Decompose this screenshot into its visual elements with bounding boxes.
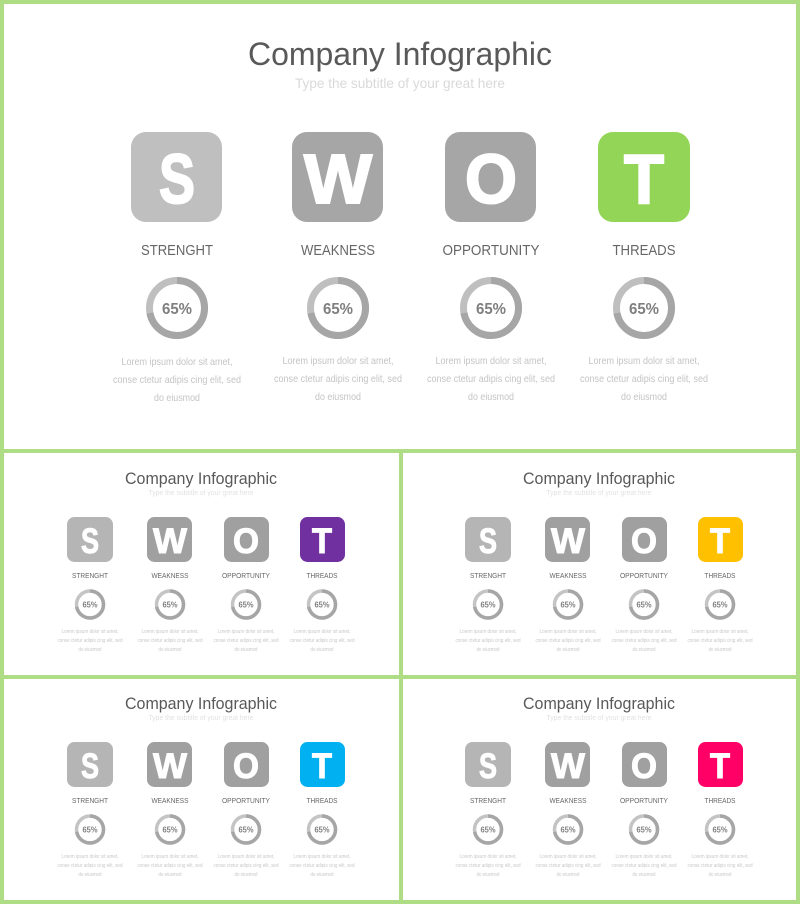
panel: blue variant: Lorem ipsum dolor sit amet, — [294, 854, 350, 860]
panel: blue variant: conse ctetur adipis cing elit, sed — [290, 863, 355, 869]
panel: pink variant: O — [631, 747, 657, 786]
panel: blue variant: STRENGHT — [72, 796, 108, 805]
column: weakness: do eiusmod — [315, 391, 361, 403]
column: weakness: W — [304, 140, 372, 218]
panel: purple variant: S — [81, 522, 99, 561]
panel: pink variant: Type the subtitle of your great here — [546, 715, 652, 722]
column: strength: 65% — [162, 301, 192, 318]
panel: yellow variant: W — [551, 522, 585, 561]
panel: purple variant: 65% — [314, 600, 330, 610]
panel: blue variant: THREADS — [306, 796, 338, 805]
panel: yellow variant: conse ctetur adipis cing elit, sed — [536, 638, 601, 644]
panel: pink variant: Lorem ipsum dolor sit amet, — [460, 854, 516, 860]
column: opportunity: do eiusmod — [468, 391, 514, 403]
panel: yellow variant: conse ctetur adipis cing elit, sed — [456, 638, 521, 644]
panel: blue variant — [4, 679, 399, 900]
panel: pink variant: THREADS — [704, 796, 736, 805]
panel: pink variant: 65% — [560, 826, 576, 834]
panel: blue variant: WEAKNESS — [152, 796, 188, 805]
panel: blue variant: 65% — [314, 826, 330, 834]
panel: pink variant: conse ctetur adipis cing elit, sed — [456, 863, 521, 869]
panel: yellow variant: THREADS — [704, 571, 736, 580]
panel: purple variant: 65% — [238, 600, 254, 610]
column: opportunity: conse ctetur adipis cing elit, sed — [427, 373, 555, 385]
panel: yellow variant — [403, 453, 796, 675]
column: weakness: WEAKNESS — [301, 243, 375, 259]
panel: purple variant: Type the subtitle of your great here — [148, 490, 254, 497]
column: strength: do eiusmod — [154, 392, 200, 404]
column: opportunity: 65% — [476, 301, 506, 318]
title: Company Infographic — [248, 36, 552, 72]
panel: blue variant: do eiusmod — [158, 872, 182, 878]
panel: blue variant: 65% — [82, 826, 98, 834]
column: opportunity — [427, 132, 555, 403]
column: threads: conse ctetur adipis cing elit, sed — [580, 373, 708, 385]
panel: purple variant: WEAKNESS — [152, 571, 188, 580]
panel: blue variant: O — [233, 747, 259, 786]
panel: yellow variant: S — [479, 522, 497, 561]
column: threads — [580, 132, 708, 403]
panel: pink variant: STRENGHT — [470, 796, 506, 805]
panel: blue variant: 65% — [162, 826, 178, 834]
panel: pink variant: 65% — [636, 826, 652, 834]
panel: pink variant: conse ctetur adipis cing elit, sed — [612, 863, 677, 869]
panel: yellow variant: WEAKNESS — [550, 571, 586, 580]
column: weakness: 65% — [323, 301, 353, 318]
panel: yellow variant: Lorem ipsum dolor sit amet, — [616, 629, 672, 635]
panel: purple variant: do eiusmod — [78, 647, 102, 653]
panel: purple variant: Lorem ipsum dolor sit amet, — [62, 629, 118, 635]
panel: pink variant: 65% — [712, 826, 728, 834]
column: threads: T — [624, 140, 664, 218]
panel: purple variant: Company Infographic — [125, 470, 277, 488]
panel: pink variant: 65% — [480, 826, 496, 834]
column: opportunity: Lorem ipsum dolor sit amet, — [436, 355, 546, 367]
panel: purple variant: conse ctetur adipis cing elit, sed — [58, 638, 123, 644]
panel: pink variant: S — [479, 747, 497, 786]
panel: yellow variant: 65% — [480, 600, 496, 610]
panel: yellow variant: 65% — [636, 600, 652, 610]
panel: yellow variant: 65% — [560, 600, 576, 610]
panel: purple variant — [4, 453, 399, 675]
panel: purple variant: THREADS — [306, 571, 338, 580]
panel: blue variant: conse ctetur adipis cing elit, sed — [58, 863, 123, 869]
subtitle: Type the subtitle of your great here — [295, 75, 505, 91]
panel: yellow variant: conse ctetur adipis cing elit, sed — [612, 638, 677, 644]
panel: blue variant: Company Infographic — [125, 695, 277, 713]
panel: blue variant: do eiusmod — [234, 872, 258, 878]
panel: purple variant: 65% — [82, 600, 98, 610]
panel: yellow variant: conse ctetur adipis cing elit, sed — [688, 638, 753, 644]
column: weakness — [274, 132, 402, 403]
panel: yellow variant: STRENGHT — [470, 571, 506, 580]
panel: blue variant: Lorem ipsum dolor sit amet, — [142, 854, 198, 860]
panel: pink variant: W — [551, 747, 585, 786]
panel: pink variant: Lorem ipsum dolor sit amet, — [616, 854, 672, 860]
panel: yellow variant: do eiusmod — [708, 647, 732, 653]
panel: yellow variant: do eiusmod — [556, 647, 580, 653]
panel: purple variant: do eiusmod — [234, 647, 258, 653]
panel: yellow variant: do eiusmod — [476, 647, 500, 653]
column: threads: THREADS — [612, 243, 676, 259]
column: opportunity: OPPORTUNITY — [442, 243, 540, 259]
panel: yellow variant: O — [631, 522, 657, 561]
panel: purple variant: conse ctetur adipis cing elit, sed — [290, 638, 355, 644]
panel: pink variant: do eiusmod — [632, 872, 656, 878]
panel: purple variant: W — [153, 522, 187, 561]
column: threads: Lorem ipsum dolor sit amet, — [588, 355, 700, 367]
panel: yellow variant: Type the subtitle of your great here — [546, 490, 652, 497]
panel: yellow variant: OPPORTUNITY — [620, 571, 668, 580]
column: strength: STRENGHT — [141, 243, 213, 259]
panel: pink variant: conse ctetur adipis cing elit, sed — [536, 863, 601, 869]
panel: pink variant: WEAKNESS — [550, 796, 586, 805]
column: strength: Lorem ipsum dolor sit amet, — [122, 356, 232, 368]
panel: purple variant: do eiusmod — [310, 647, 334, 653]
panel: purple variant: STRENGHT — [72, 571, 108, 580]
panel: purple variant: O — [233, 522, 259, 561]
column: weakness: Lorem ipsum dolor sit amet, — [282, 355, 394, 367]
column: weakness: conse ctetur adipis cing elit, sed — [274, 373, 402, 385]
panel: yellow variant: T — [710, 522, 730, 561]
column: strength: S — [159, 140, 195, 218]
panel: blue variant: W — [153, 747, 187, 786]
panel: yellow variant: do eiusmod — [632, 647, 656, 653]
column: threads: do eiusmod — [621, 391, 667, 403]
panel: blue variant: do eiusmod — [310, 872, 334, 878]
panel: blue variant: Type the subtitle of your great here — [148, 715, 254, 722]
column: opportunity: O — [465, 140, 517, 218]
panel: blue variant: S — [81, 747, 99, 786]
panel: pink variant: T — [710, 747, 730, 786]
panel: purple variant: Lorem ipsum dolor sit amet, — [294, 629, 350, 635]
panel: pink variant: Company Infographic — [523, 695, 675, 713]
panel: blue variant: Lorem ipsum dolor sit amet, — [218, 854, 274, 860]
panel: yellow variant: Lorem ipsum dolor sit amet, — [540, 629, 596, 635]
panel: purple variant: 65% — [162, 600, 178, 610]
panel: blue variant: conse ctetur adipis cing elit, sed — [138, 863, 203, 869]
panel: purple variant: conse ctetur adipis cing elit, sed — [138, 638, 203, 644]
panel: pink variant: Lorem ipsum dolor sit amet, — [540, 854, 596, 860]
panel: yellow variant: Company Infographic — [523, 470, 675, 488]
column: strength: conse ctetur adipis cing elit, sed — [113, 374, 241, 386]
panel: blue variant: Lorem ipsum dolor sit amet, — [62, 854, 118, 860]
panel: purple variant: do eiusmod — [158, 647, 182, 653]
panel: pink variant: do eiusmod — [556, 872, 580, 878]
panel: purple variant: Lorem ipsum dolor sit amet, — [142, 629, 198, 635]
panel: pink variant: do eiusmod — [708, 872, 732, 878]
panel: blue variant: OPPORTUNITY — [222, 796, 270, 805]
column: threads: 65% — [629, 301, 659, 318]
panel: purple variant: T — [312, 522, 332, 561]
panel: blue variant: 65% — [238, 826, 254, 834]
column: strength — [113, 132, 241, 404]
panel: blue variant: do eiusmod — [78, 872, 102, 878]
panel: pink variant: do eiusmod — [476, 872, 500, 878]
panel: purple variant: Lorem ipsum dolor sit amet, — [218, 629, 274, 635]
panel: yellow variant: 65% — [712, 600, 728, 610]
panel: purple variant: conse ctetur adipis cing elit, sed — [214, 638, 279, 644]
panel: pink variant: Lorem ipsum dolor sit amet, — [692, 854, 748, 860]
panel: blue variant: T — [312, 747, 332, 786]
panel: purple variant: OPPORTUNITY — [222, 571, 270, 580]
panel: blue variant: conse ctetur adipis cing elit, sed — [214, 863, 279, 869]
panel: pink variant: OPPORTUNITY — [620, 796, 668, 805]
panel: yellow variant: Lorem ipsum dolor sit amet, — [692, 629, 748, 635]
panel: pink variant: conse ctetur adipis cing elit, sed — [688, 863, 753, 869]
panel: pink variant — [403, 679, 796, 900]
panel: main SWOT slide, green accent — [4, 4, 796, 449]
panel: yellow variant: Lorem ipsum dolor sit amet, — [460, 629, 516, 635]
